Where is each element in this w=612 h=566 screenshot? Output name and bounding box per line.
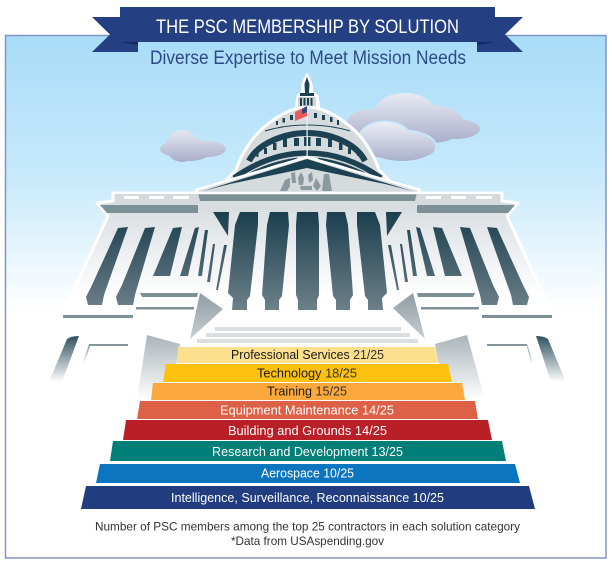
entablature [196, 191, 419, 212]
step: training [151, 383, 465, 400]
step: technology [163, 364, 452, 382]
title: THE PSC MEMBERSHIP BY SOLUTION [156, 17, 459, 38]
stair treads [197, 327, 418, 343]
step: professional services [177, 347, 438, 363]
lower wing curves [49, 336, 566, 382]
step: building and grounds [123, 420, 492, 440]
upper stair cheek walls [190, 293, 425, 339]
banner ribbon [92, 7, 523, 52]
step: equipment maintenance [137, 401, 478, 419]
lower dark band [234, 153, 381, 178]
stripes beside stairs [63, 293, 552, 318]
upper windows [276, 113, 339, 125]
central columns [213, 212, 402, 310]
thin rib [265, 125, 350, 131]
step: training: Training 15/25 [267, 384, 347, 398]
cloud: front right halo [359, 122, 435, 161]
dark streaks [248, 159, 297, 175]
right wing columns [388, 227, 529, 305]
step: technology: Technology 18/25 [257, 366, 357, 380]
footnote [95, 520, 520, 548]
step: research and development [110, 441, 506, 461]
dome body [226, 107, 389, 180]
step: professional services: Professional Services 21/25 [231, 348, 384, 362]
stepped chart: solution categories [81, 347, 535, 509]
pediment [196, 157, 420, 193]
cloud: left [160, 130, 226, 162]
lower windows [256, 137, 359, 157]
step: intelligence, surveillance, reconnaissance: Intelligence, Surveillance, Reconnaissance 10/25 [171, 491, 444, 505]
footnote: *Data from USAspending.gov [231, 534, 384, 548]
subtitle: Diverse Expertise to Meet Mission Needs [150, 48, 466, 69]
step: aerospace [96, 464, 520, 483]
left wing wall [60, 193, 230, 320]
cloud: front right [359, 122, 435, 161]
central portico wall [199, 193, 416, 320]
lower stair cheek walls [137, 335, 485, 400]
step: research and development: Research and Development 13/25 [212, 445, 403, 459]
cloud: back right [347, 93, 480, 143]
right wing cornice [415, 194, 515, 213]
footnote: Number of PSC members among the top 25 contractors in each solution category [95, 520, 520, 534]
left wing columns [86, 227, 227, 305]
center seam [306, 107, 308, 157]
dome [226, 75, 389, 180]
lower wing thin stripes [83, 344, 533, 364]
step: aerospace: Aerospace 10/25 [261, 466, 354, 480]
pediment sculpture [280, 172, 332, 191]
step: intelligence, surveillance, reconnaissance [81, 486, 535, 509]
step: building and grounds: Building and Grounds 14/25 [228, 424, 387, 438]
capitol building [49, 75, 566, 400]
step: equipment maintenance: Equipment Maintenance 14/25 [220, 404, 394, 418]
left wing cornice [100, 194, 200, 213]
upper dark band [249, 133, 365, 161]
right wing wall [385, 193, 555, 320]
statue and lantern [296, 75, 319, 110]
flag [295, 106, 307, 121]
